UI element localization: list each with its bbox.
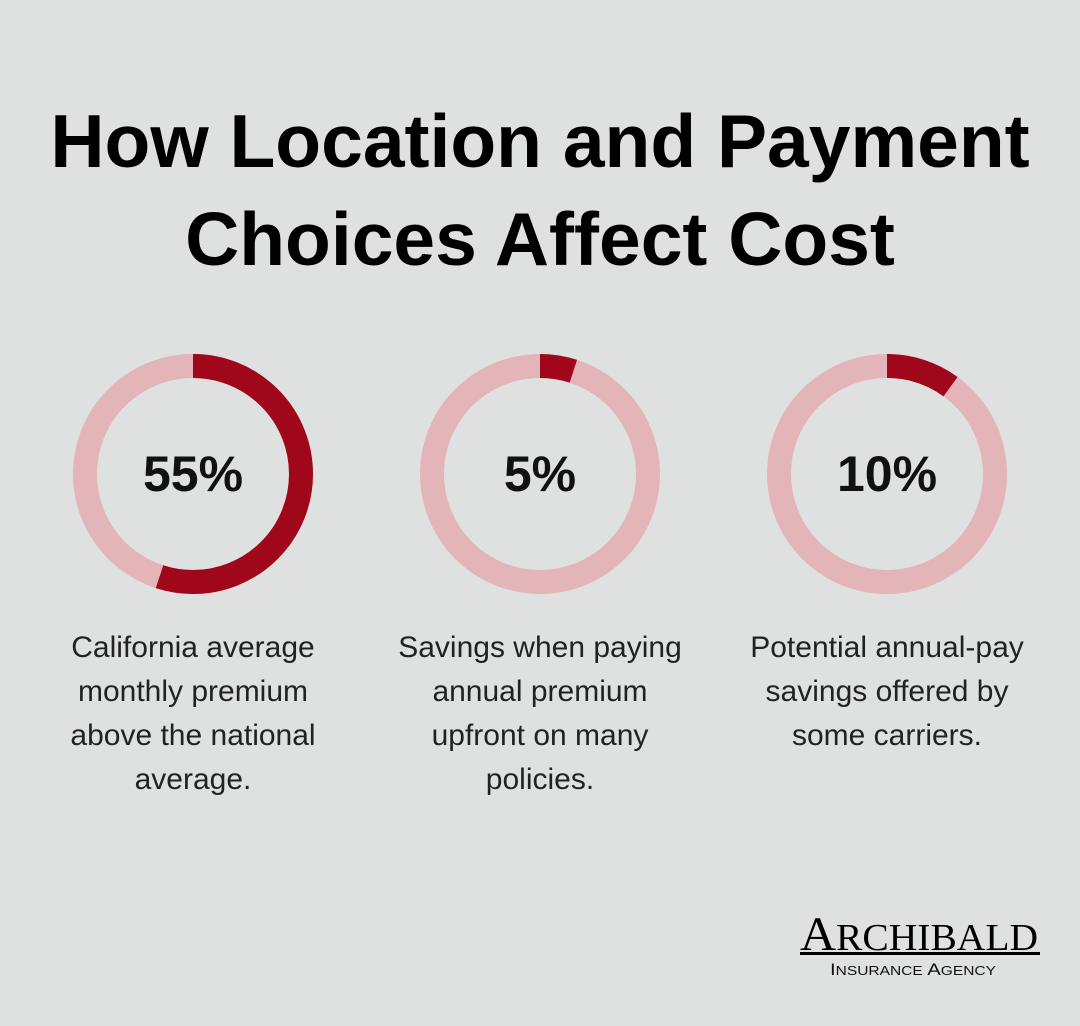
- title: Choices Affect Cost: [185, 197, 895, 281]
- chart: 5% ring: 5%: [504, 446, 576, 502]
- caption: 10%: Potential annual-pay savings offered by some carriers.: [750, 631, 1024, 752]
- chart: 10% ring: 10%: [837, 446, 937, 502]
- title: [50, 99, 1030, 281]
- logo: INSURANCE AGENCY: [830, 960, 996, 979]
- chart: 10% ring: [767, 354, 1007, 594]
- chart: 5% ring: [420, 354, 660, 594]
- chart: 55% ring: 55%: [143, 446, 243, 502]
- chart: 55% ring: [73, 354, 313, 594]
- title: How Location and Payment: [50, 99, 1030, 183]
- caption: 5%: Savings when paying annual premium upfront on many policies.: [398, 631, 682, 796]
- logo: ARCHIBALD: [800, 908, 1038, 961]
- caption: 55%: California average monthly premium above the national average.: [70, 631, 316, 796]
